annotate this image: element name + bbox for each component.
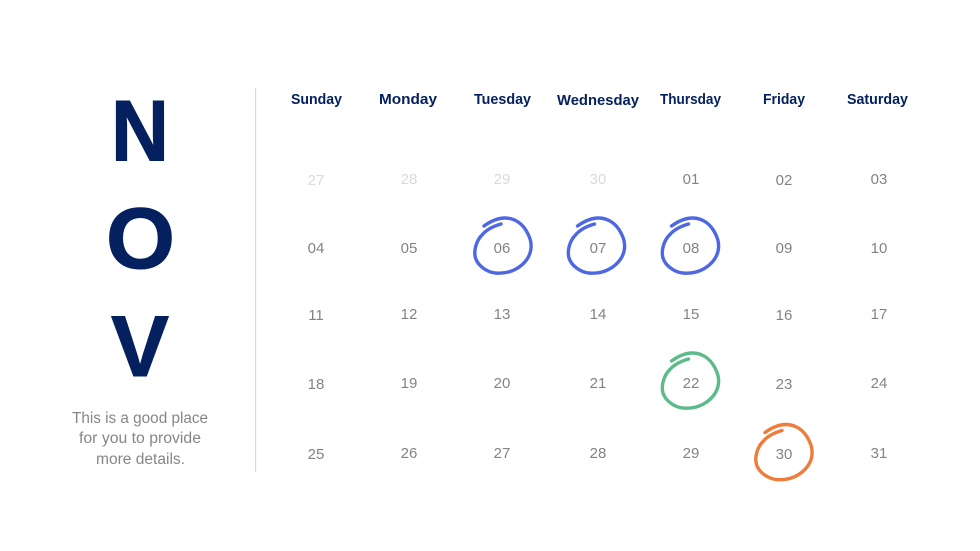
calendar row 3: 14 [590, 306, 606, 323]
description text: This is a good place [72, 410, 208, 427]
letter O: O [106, 191, 175, 287]
calendar row 5: 25 [308, 446, 324, 463]
weekday headings: Tuesday [474, 91, 532, 108]
letter N: N [111, 84, 169, 180]
weekday headings: Sunday [291, 91, 343, 108]
description text: for you to provide [79, 430, 201, 447]
letter V: V [111, 299, 169, 395]
calendar row 1: 28 [401, 171, 417, 188]
calendar row 1: 03 [871, 171, 887, 188]
calendar row 2: 06 [494, 240, 510, 257]
description text: more details. [96, 451, 185, 468]
calendar row 3: 16 [776, 307, 792, 324]
calendar row 3: 12 [401, 306, 417, 323]
calendar row 4 [308, 375, 887, 393]
calendar row 4: 24 [871, 375, 887, 392]
calendar row 5 [308, 445, 887, 463]
calendar row 4: 21 [590, 375, 606, 392]
weekday headings: Saturday [847, 91, 909, 108]
calendar row 4: 22 [683, 375, 699, 392]
calendar row 2: 10 [871, 240, 887, 257]
calendar row 3: 11 [308, 307, 324, 324]
calendar row 4: 23 [776, 376, 792, 393]
calendar row 4: 18 [308, 376, 324, 393]
weekday headings: Friday [763, 91, 806, 108]
weekday headings: Wednesday [557, 92, 640, 109]
calendar row 1: 27 [308, 172, 324, 189]
calendar row 4: 19 [401, 375, 417, 392]
calendar row 5: 29 [683, 445, 699, 462]
calendar row 2: 05 [401, 240, 417, 257]
calendar row 2: 08 [683, 240, 699, 257]
calendar row 3: 13 [494, 306, 510, 323]
calendar row 2: 07 [590, 240, 606, 257]
calendar row 1 [308, 171, 887, 189]
calendar row 2: 09 [776, 240, 792, 257]
month title: NOV [106, 84, 175, 395]
blue hand-drawn circle on 06 [475, 218, 531, 273]
calendar row 5: 31 [871, 445, 887, 462]
calendar row 1: 01 [683, 171, 699, 188]
calendar row 2: 04 [308, 240, 324, 257]
calendar row 5: 30 [776, 446, 792, 463]
calendar row 1: 29 [494, 171, 510, 188]
calendar row 1: 30 [590, 171, 606, 188]
calendar row 5: 26 [401, 445, 417, 462]
calendar row 1: 02 [776, 172, 792, 189]
calendar row 3: 15 [683, 306, 699, 323]
calendar row 2 [308, 240, 887, 257]
calendar row 4: 20 [494, 375, 510, 392]
calendar row 5: 27 [494, 445, 510, 462]
calendar row 5: 28 [590, 445, 606, 462]
green hand-drawn circle on 22 [662, 353, 719, 408]
description text [72, 410, 208, 468]
weekday headings [291, 91, 909, 109]
blue hand-drawn circle on 07 [568, 218, 625, 273]
orange hand-drawn circle on 30 [756, 424, 812, 480]
calendar row 3 [308, 306, 887, 324]
weekday headings: Thursday [660, 91, 722, 108]
blue hand-drawn circle on 08 [662, 218, 719, 273]
calendar row 3: 17 [871, 306, 887, 323]
weekday headings: Monday [379, 91, 438, 108]
